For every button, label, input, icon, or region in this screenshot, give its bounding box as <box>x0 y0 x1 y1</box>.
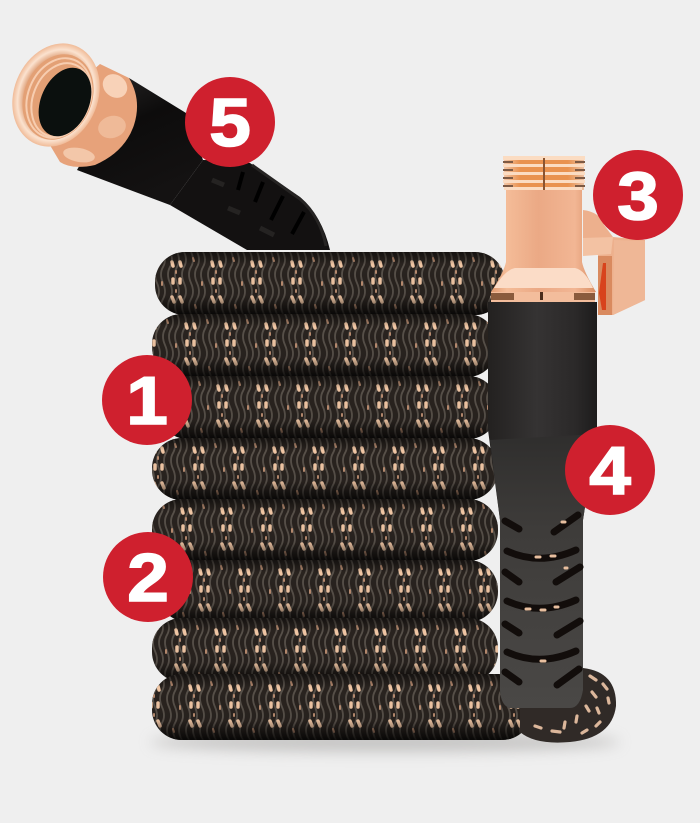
lever handle of the bottom connector <box>583 210 645 315</box>
coil 3 <box>158 376 498 439</box>
badge 2 <box>103 532 193 622</box>
badge 4 <box>565 425 655 515</box>
ring <box>0 30 115 160</box>
black tube <box>77 78 203 205</box>
badge 3 <box>593 150 683 240</box>
ground shadow <box>150 732 620 752</box>
badge 5: 5 <box>209 85 251 161</box>
ribbed hose neck at the top fitting <box>170 160 330 250</box>
badge 2: 2 <box>127 540 169 616</box>
copper bottom connector <box>491 156 596 302</box>
badge 1 <box>102 355 192 445</box>
hose coils <box>152 252 532 740</box>
badge 1: 1 <box>126 363 168 439</box>
badge 4: 4 <box>589 433 631 509</box>
badge 5 <box>185 77 275 167</box>
female swivel fitting <box>0 30 203 205</box>
coil 1 <box>155 252 505 315</box>
coil 7 <box>152 618 498 682</box>
fitting bore <box>28 59 102 145</box>
coil 4 <box>152 438 498 500</box>
hose end loop at the base <box>520 668 616 743</box>
coil 6 <box>158 560 498 622</box>
badge 3: 3 <box>617 158 659 234</box>
coil 8 <box>152 674 532 740</box>
black grip sleeve <box>488 302 597 708</box>
coil 2 <box>152 314 497 377</box>
copper body <box>35 64 137 167</box>
sleeve slots <box>505 515 580 685</box>
threads <box>503 156 585 190</box>
coil 5 <box>152 499 498 561</box>
